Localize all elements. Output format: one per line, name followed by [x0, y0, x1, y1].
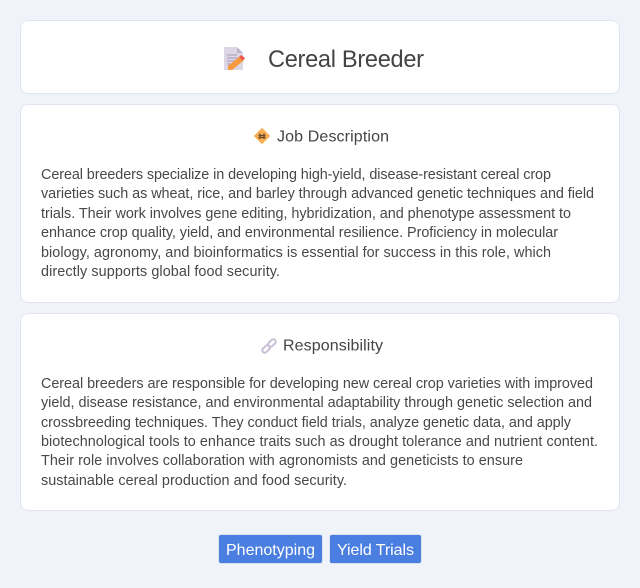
text block: responsibility: Their role involves collaboration with agronomists and geneticists to ensure	[41, 453, 523, 469]
panel: title card	[20, 20, 620, 94]
text block: responsibility: Cereal breeders are responsible for developing new cereal crop varieties with improved	[41, 376, 593, 392]
text block: responsibility	[41, 376, 598, 489]
icon: diamond sign	[254, 128, 270, 144]
text block: job description: directly supports global food security.	[41, 264, 280, 280]
panel: job description	[20, 104, 620, 303]
icon: document with pencil	[224, 47, 245, 70]
tag: yield trials	[329, 534, 422, 564]
text block: responsibility: sustainable cereal production and food security.	[41, 473, 347, 489]
text block: job description: trials. Their work involves gene editing, hybridization, and phenotype assessment to	[41, 206, 571, 222]
heading: job description: Job Description	[277, 129, 389, 146]
text block: job description	[41, 167, 594, 280]
heading: responsibility: Responsibility	[283, 338, 383, 355]
text block: job description: biology, agronomy, and bioinformatics is essential for success in this role, which	[41, 245, 551, 261]
tag: phenotyping: Phenotyping	[226, 542, 315, 559]
text block: responsibility: yield, disease resistance, and environmental adaptability through genetic selection and	[41, 395, 592, 411]
text block: responsibility: crossbreeding techniques. They conduct field trials, analyze genetic data, and apply	[41, 415, 572, 431]
text block: job description: enhance crop quality, yield, and environmental resilience. Proficiency in molecular	[41, 225, 558, 241]
text block: job description: varieties such as wheat, rice, and barley through advanced genetic techniques and field	[41, 186, 594, 202]
tag: phenotyping	[218, 534, 323, 564]
title: Cereal Breeder	[268, 47, 424, 73]
tag: yield trials: Yield Trials	[337, 542, 414, 559]
text block: job description: Cereal breeders specialize in developing high-yield, disease-resistant cereal crop	[41, 167, 551, 183]
panel: responsibility	[20, 313, 620, 511]
text block: responsibility: biotechnological tools to enhance traits such as drought tolerance and nutrient content.	[41, 434, 598, 450]
icon: chain link	[261, 338, 277, 354]
